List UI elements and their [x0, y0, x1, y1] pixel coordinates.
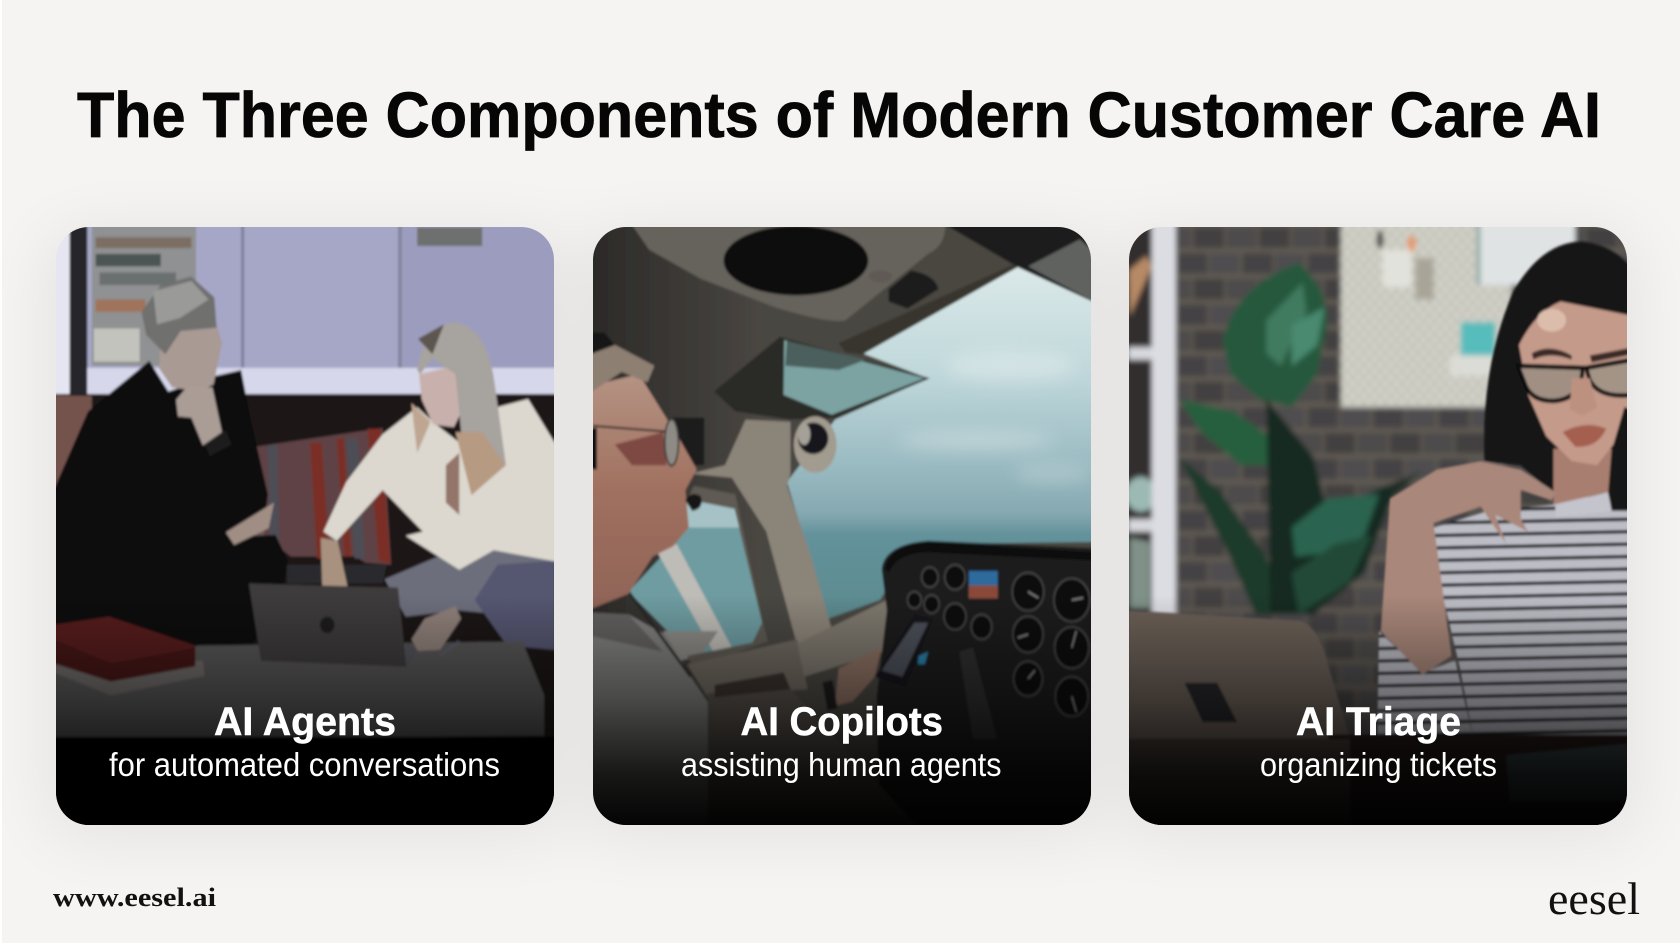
dashboard — [877, 541, 1097, 834]
shirt — [1434, 492, 1633, 739]
text: assisting human agents: assisting human agents — [681, 746, 1002, 783]
glasses — [1518, 366, 1583, 401]
pilot head — [587, 374, 697, 610]
photo: two colleagues at a laptop — [54, 225, 559, 834]
pilot shirt — [593, 614, 709, 825]
man — [54, 361, 288, 650]
arm and hand — [1381, 461, 1555, 675]
heading: AI Copilots: AI Copilots — [740, 700, 943, 744]
heading: AI Triage: AI Triage — [1296, 700, 1461, 744]
sofa — [54, 394, 559, 742]
photo: pilot in a cockpit — [587, 221, 1097, 834]
panel: AI Agents — [54, 225, 559, 834]
woman forearm — [321, 538, 347, 586]
soft clouds — [897, 351, 1090, 479]
woman hand on laptop — [411, 606, 461, 651]
pegboard — [1341, 221, 1512, 407]
neck — [1553, 449, 1612, 505]
heading: AI Agents: AI Agents — [214, 700, 396, 744]
photo: woman with glasses at a laptop — [1125, 221, 1637, 834]
desk — [1328, 735, 1637, 834]
gradient overlay — [1129, 595, 1627, 826]
hair — [1484, 241, 1633, 519]
footer: website url: www.eesel.ai — [53, 883, 216, 912]
side window — [629, 526, 764, 654]
table — [54, 641, 544, 740]
gradient overlay — [593, 595, 1091, 826]
card shadows — [46, 232, 1637, 838]
book — [54, 661, 205, 695]
plant — [1223, 262, 1328, 407]
woman jeans — [384, 550, 550, 618]
text: organizing tickets: organizing tickets — [1260, 746, 1497, 783]
phone and hand — [876, 670, 881, 678]
footer: eesel logo wordmark: eesel — [1548, 873, 1640, 924]
woman blouse — [323, 399, 556, 570]
laptop — [249, 583, 406, 667]
panel: AI Triage — [1125, 221, 1637, 834]
woman head — [419, 366, 464, 427]
text: for automated conversations: for automated conversations — [109, 746, 500, 783]
gradient overlay — [56, 595, 554, 826]
gauges — [908, 565, 1090, 716]
pillow — [256, 428, 391, 565]
laptop — [1128, 610, 1350, 739]
face — [1519, 302, 1633, 465]
sky and water — [787, 266, 1097, 619]
ceiling panel — [632, 225, 945, 321]
blurred background — [1125, 221, 1637, 834]
pillar — [691, 420, 832, 646]
panel: AI Copilots — [587, 221, 1097, 834]
visor — [714, 337, 930, 420]
title: The Three Components of Modern Customer Care AI — [77, 79, 1601, 151]
